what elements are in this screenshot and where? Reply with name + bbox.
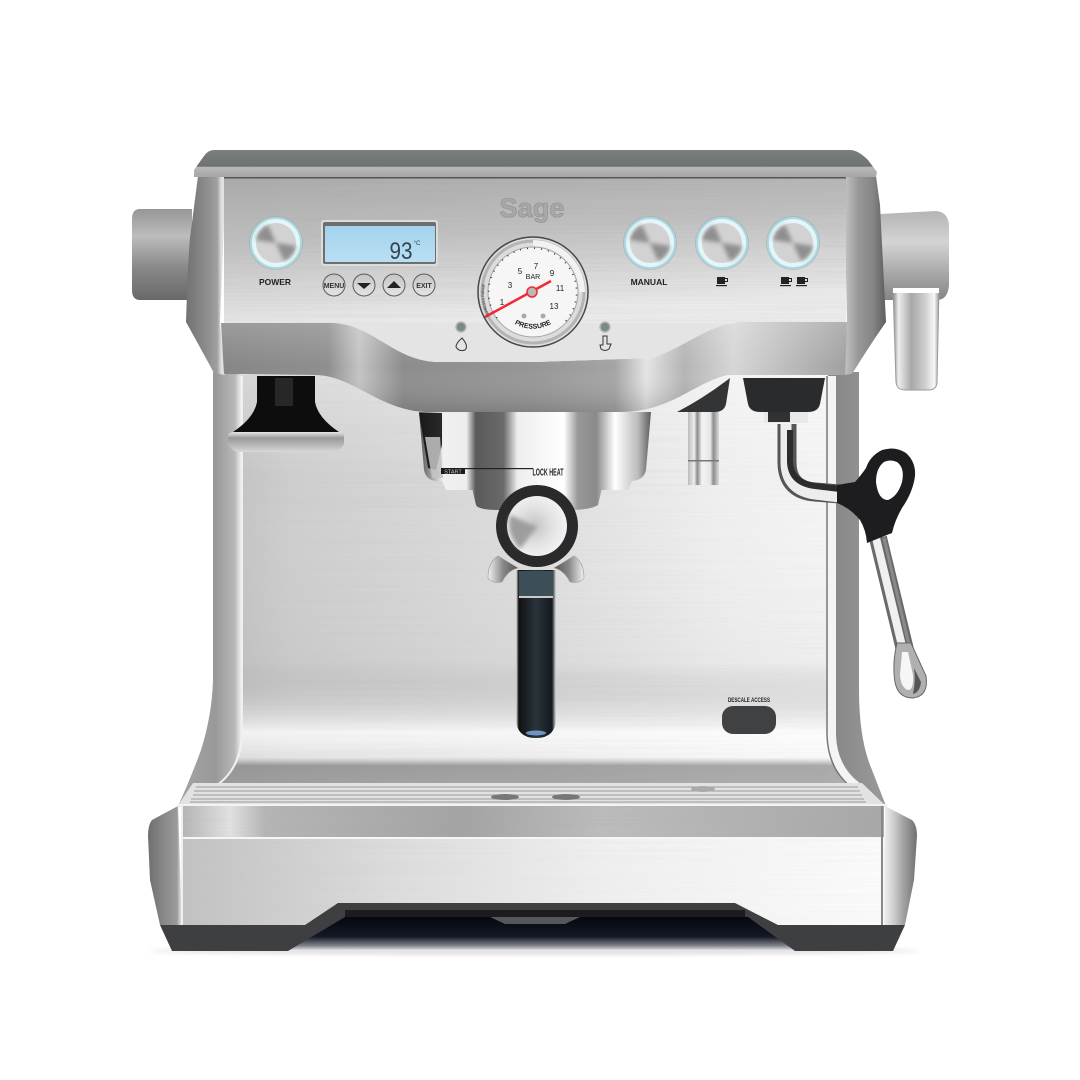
pressure gauge: 3 <box>508 281 513 290</box>
top cap <box>194 150 877 177</box>
pressure gauge: PRESSURE <box>515 320 552 329</box>
tamper <box>228 376 344 452</box>
start lock label strip: START <box>444 470 462 476</box>
water drop icon <box>456 338 466 351</box>
LCD display <box>321 220 438 266</box>
black grip with loop <box>837 449 915 543</box>
round head <box>496 485 578 567</box>
start lock label strip <box>441 468 564 478</box>
pressure gauge: 9 <box>550 269 555 278</box>
wand pipe <box>786 424 840 497</box>
single cup icon <box>716 277 728 286</box>
steam wand <box>786 424 926 698</box>
pressure gauge: 7 <box>534 262 539 271</box>
handle <box>516 570 556 738</box>
LCD display: 93 <box>390 238 412 265</box>
steam cup base dark <box>743 378 825 412</box>
water indicator light <box>456 322 466 332</box>
grate <box>177 783 887 807</box>
right base side <box>883 806 917 925</box>
manual button <box>623 216 677 270</box>
basket below group <box>472 488 602 510</box>
exit button: EXIT <box>416 283 433 290</box>
double cup icon <box>780 277 808 286</box>
hot water dark cone <box>677 378 730 412</box>
brand logo: Sage <box>500 193 564 223</box>
drop shadow under machine <box>150 947 920 955</box>
LCD display: °C <box>414 241 421 247</box>
temperature indicator light <box>600 322 610 332</box>
wand tube <box>876 538 909 650</box>
power button <box>249 216 303 270</box>
pressure gauge: 1 <box>500 298 505 307</box>
left spout arm <box>488 556 518 582</box>
pressure gauge: 11 <box>556 284 565 293</box>
portafilter <box>488 485 584 738</box>
pressure gauge: 13 <box>550 302 559 311</box>
tray front lower <box>181 838 884 926</box>
power label: POWER <box>259 277 291 287</box>
down button <box>353 274 375 296</box>
exit button <box>413 274 435 296</box>
right spout arm <box>554 556 584 582</box>
back splash panel <box>214 375 857 786</box>
pressure gauge: ESPRESSO RANGE <box>482 284 490 317</box>
needle <box>485 281 551 317</box>
left column <box>178 372 241 806</box>
single shot button <box>695 216 749 270</box>
right side knob and steam cup <box>880 211 949 390</box>
pressure gauge: 5 <box>518 267 523 276</box>
pressure gauge: BAR <box>526 274 540 281</box>
up button <box>383 274 405 296</box>
right column <box>826 372 886 806</box>
steam icon <box>600 336 611 350</box>
start lock label strip: LOCK HEAT <box>532 468 564 478</box>
menu button: MENU <box>324 283 344 290</box>
descale access label: DESCALE ACCESS <box>728 698 770 704</box>
menu button <box>323 274 345 296</box>
control panel front <box>224 177 846 324</box>
manual label: MANUAL <box>631 277 667 287</box>
steam valve connector <box>764 412 808 423</box>
tray front upper <box>181 806 884 839</box>
hot water spout <box>688 412 719 485</box>
double shot button <box>766 216 820 270</box>
lower wave band <box>221 322 847 412</box>
left base side <box>148 806 182 925</box>
head side left <box>186 176 226 375</box>
panel lit area beneath gauge <box>335 323 745 362</box>
wand tip <box>894 643 926 698</box>
descale access door <box>722 706 776 734</box>
group head chrome <box>419 412 651 510</box>
pressure gauge <box>477 236 589 348</box>
head side right <box>843 176 886 375</box>
left side knob <box>132 209 192 300</box>
drip tray and base <box>148 783 917 926</box>
dark underside and feet <box>160 903 905 951</box>
